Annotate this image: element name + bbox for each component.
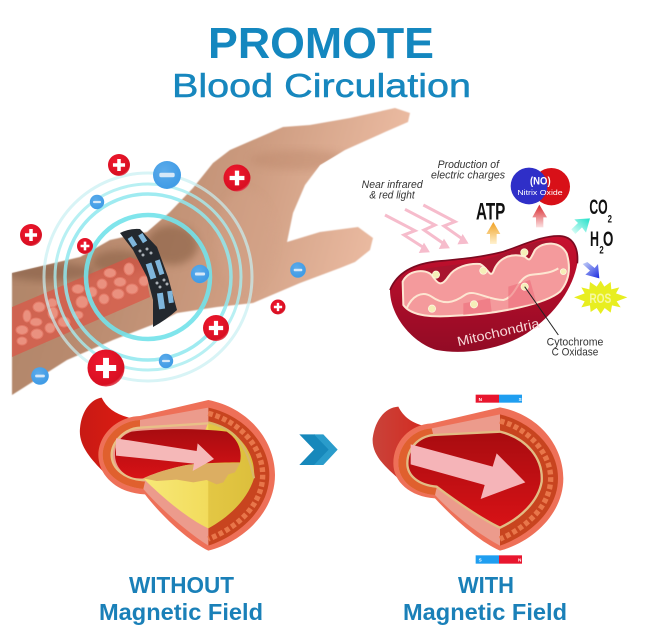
panel: artery without magnetic field <box>80 398 275 551</box>
caption: with magnetic field: WITH <box>458 572 514 598</box>
mitochondrion body <box>390 236 578 352</box>
CO2: 2 <box>608 213 612 225</box>
magnet: bottom <box>476 555 522 564</box>
light zigzag arrows <box>385 205 468 253</box>
subtitle: Blood Circulation <box>172 67 471 104</box>
title <box>172 19 471 104</box>
flow arrow: strong <box>411 444 525 499</box>
caption: with magnetic field <box>403 572 567 625</box>
nitric oxide circles <box>511 168 570 205</box>
panel: artery with magnetic field <box>373 395 563 564</box>
CO2 <box>589 195 612 225</box>
cytochrome label: Cytochrome <box>547 336 603 348</box>
H2O: O <box>603 227 613 251</box>
magnet: bottom: S <box>479 557 482 562</box>
artery wall <box>98 400 275 551</box>
narrowed lumen <box>115 429 241 478</box>
near infrared label: & red light <box>369 189 416 201</box>
nitric oxide circles: Nitrix Oxide <box>517 188 563 197</box>
magnet: top <box>476 395 522 403</box>
artery tube <box>80 398 132 473</box>
cytochrome label: C Oxidase <box>552 347 598 359</box>
inner chamber <box>401 241 569 315</box>
caption: without magnetic field: Magnetic Field <box>99 599 263 625</box>
CO2: CO <box>589 195 608 219</box>
arrow: nitric oxide <box>532 205 547 227</box>
title: PROMOTE <box>208 19 434 68</box>
plaque <box>143 422 254 528</box>
blood vessel band with cells <box>12 257 150 357</box>
caption: with magnetic field: Magnetic Field <box>403 599 567 625</box>
icon: double chevron <box>299 434 338 465</box>
charged particles: negative <box>31 161 306 385</box>
artery wall <box>393 407 563 551</box>
H2O <box>590 227 613 257</box>
panel: arm with magnetic bracelet <box>5 108 410 395</box>
arrow: ROS <box>583 262 599 278</box>
ATP label: ATP <box>476 198 505 225</box>
hand and forearm <box>5 108 410 395</box>
magnet: bottom: N <box>518 557 522 562</box>
artery tube <box>373 407 427 480</box>
production label: Production of <box>438 159 500 171</box>
near infrared label: Near infrared <box>362 179 424 191</box>
near infrared label <box>362 179 424 201</box>
arrow: ATP <box>486 222 500 244</box>
ROS burst: ROS <box>589 290 611 306</box>
caption: without magnetic field <box>99 572 263 625</box>
cytochrome label <box>547 336 603 359</box>
H2O: 2 <box>599 245 604 257</box>
bracelet <box>120 229 177 327</box>
pointer line <box>525 287 558 335</box>
arrow: CO2 <box>571 218 590 234</box>
panel: mitochondria diagram <box>362 159 627 359</box>
matrix granules <box>428 249 566 312</box>
charged particles: positive <box>20 154 286 386</box>
plaque crust <box>143 463 240 484</box>
nitric oxide circles: (NO) <box>530 176 551 188</box>
caption: without magnetic field: WITHOUT <box>129 572 234 598</box>
ROS burst <box>574 281 627 314</box>
magnet: top: S <box>519 397 522 402</box>
production label: electric charges <box>431 169 506 181</box>
H2O: H <box>590 227 599 251</box>
open lumen <box>407 432 542 528</box>
magnetic rings <box>44 173 252 381</box>
production label <box>431 159 506 181</box>
flow arrow: weak <box>116 438 214 471</box>
Mitochondria label: Mitochondria <box>456 315 542 349</box>
magnet: top: N <box>479 397 483 402</box>
